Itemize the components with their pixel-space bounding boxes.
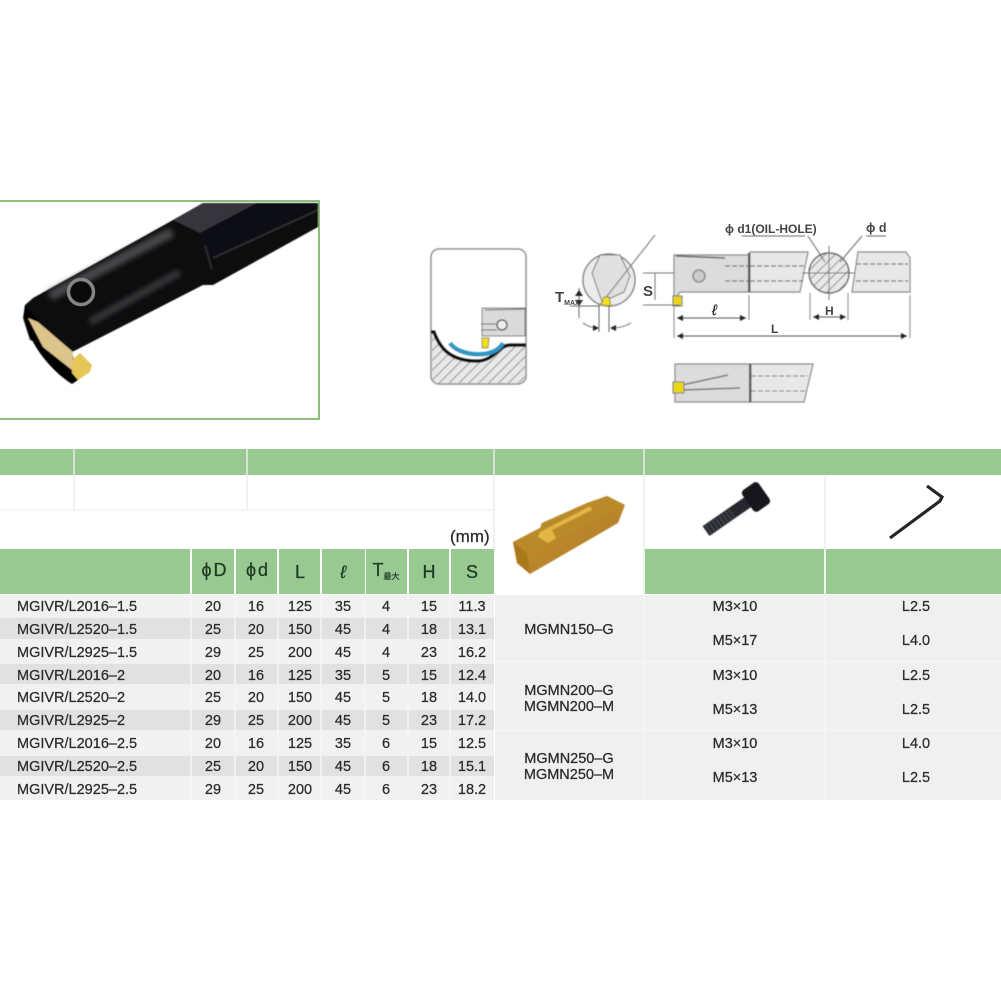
table header row: 最大 [384, 571, 400, 581]
table row stripes [0, 595, 1001, 800]
table: tool holder dimensions: 29 [205, 713, 221, 729]
table: insert models: MGMN200–G [524, 683, 614, 699]
screw hole [68, 280, 94, 304]
table: wrench sizes: L2.5 [902, 702, 930, 718]
unit label: (mm) [450, 527, 490, 546]
table: tool holder dimensions [17, 599, 486, 798]
table: tool holder dimensions: 125 [288, 736, 312, 752]
table: tool holder dimensions: 29 [205, 645, 221, 661]
table: tool holder dimensions: 20 [248, 622, 264, 638]
table: tool holder dimensions: 18.2 [458, 782, 486, 798]
table: tool holder dimensions: 150 [288, 622, 312, 638]
table header row: ℓ [339, 562, 347, 582]
table header row: ϕD [201, 560, 229, 580]
table: tool holder dimensions: 25 [248, 645, 264, 661]
table: tool holder dimensions: 150 [288, 690, 312, 706]
table: screw sizes: M5×13 [713, 770, 757, 786]
diagram: grooving operation [431, 249, 526, 384]
table: tool holder dimensions: 150 [288, 759, 312, 775]
table: insert models [524, 622, 614, 783]
table: tool holder dimensions: 20 [205, 668, 221, 684]
table: wrench sizes [902, 599, 930, 786]
table: tool holder dimensions: 125 [288, 668, 312, 684]
table: tool holder dimensions: 20 [205, 736, 221, 752]
table: screw sizes: M3×10 [713, 599, 757, 615]
table: tool holder dimensions: 15 [421, 736, 437, 752]
table: wrench sizes: L4.0 [902, 633, 930, 649]
table: tool holder dimensions: 16 [248, 599, 264, 615]
table: tool holder dimensions: 20 [248, 759, 264, 775]
label: H: H [825, 304, 834, 318]
table: wrench sizes: L4.0 [902, 736, 930, 752]
table: tool holder dimensions: 35 [335, 599, 351, 615]
table: tool holder dimensions: 18 [421, 622, 437, 638]
table: tool holder dimensions: 6 [382, 782, 390, 798]
table: tool holder dimensions: 16 [248, 668, 264, 684]
table: tool holder dimensions: 45 [335, 713, 351, 729]
table: tool holder dimensions: MGIVR/L2520–1.5 [17, 622, 137, 638]
table: tool holder dimensions: 25 [248, 782, 264, 798]
table: tool holder dimensions: 20 [205, 599, 221, 615]
table: insert models: MGMN150–G [524, 622, 614, 638]
table: wrench sizes: L2.5 [902, 599, 930, 615]
label: d: ϕ d [866, 221, 886, 235]
table: tool holder dimensions: 5 [382, 713, 390, 729]
table: tool holder dimensions: 45 [335, 690, 351, 706]
table: tool holder dimensions: MGIVR/L2925–1.5 [17, 645, 137, 661]
label: S: S [643, 283, 653, 300]
table: tool holder dimensions: 45 [335, 622, 351, 638]
label: l: ℓ [711, 302, 718, 319]
table header row: H [422, 562, 436, 582]
table: wrench sizes: L2.5 [902, 668, 930, 684]
panel: product photo of boring tool [0, 201, 319, 419]
table: tool holder dimensions: 25 [248, 713, 264, 729]
icon: gold grooving insert [513, 496, 625, 574]
table: tool holder dimensions: 11.3 [458, 599, 486, 615]
table: tool holder dimensions: MGIVR/L2016–2.5 [17, 736, 137, 752]
table: tool holder dimensions: 25 [205, 690, 221, 706]
table: tool holder dimensions: 5 [382, 668, 390, 684]
table: tool holder dimensions: 17.2 [458, 713, 486, 729]
table: screw sizes: M5×13 [713, 702, 757, 718]
table: tool holder dimensions: 23 [421, 713, 437, 729]
table: tool holder dimensions: 16 [248, 736, 264, 752]
table: wrench sizes: L2.5 [902, 770, 930, 786]
table header row: ϕd [246, 560, 270, 580]
table: tool holder dimensions: MGIVR/L2016–2 [17, 668, 125, 684]
table: tool holder dimensions: 29 [205, 782, 221, 798]
table header row [201, 560, 478, 582]
table: tool holder dimensions: 15 [421, 668, 437, 684]
table: tool holder dimensions: 45 [335, 782, 351, 798]
table: tool holder dimensions: 45 [335, 759, 351, 775]
label: T max: MAX [564, 300, 580, 307]
table: tool holder dimensions: MGIVR/L2520–2 [17, 690, 125, 706]
table: tool holder dimensions: 35 [335, 736, 351, 752]
table header row: T [372, 560, 384, 580]
table header row: S [466, 562, 478, 582]
table: tool holder dimensions: 23 [421, 645, 437, 661]
table: tool holder dimensions: 4 [382, 645, 390, 661]
table: tool holder dimensions: 12.5 [458, 736, 486, 752]
diagram: tool side view with dimensions [643, 221, 910, 402]
table header row: L [295, 562, 305, 582]
table: tool holder dimensions: 6 [382, 736, 390, 752]
diagram: end view with Tmax [555, 235, 655, 332]
label: d1 oil hole: ϕ d1(OIL-HOLE) [725, 222, 817, 236]
table: tool holder dimensions: 4 [382, 622, 390, 638]
table: tool holder dimensions: 25 [205, 622, 221, 638]
table: tool holder dimensions: 45 [335, 645, 351, 661]
table: tool holder dimensions: 18 [421, 759, 437, 775]
table: insert models: MGMN250–G [524, 751, 614, 767]
table: tool holder dimensions: MGIVR/L2520–2.5 [17, 759, 137, 775]
table: tool holder dimensions: 20 [248, 690, 264, 706]
table: tool holder dimensions: 12.4 [458, 668, 486, 684]
table: insert models: MGMN200–M [524, 699, 614, 715]
table: tool holder dimensions: 18 [421, 690, 437, 706]
icon: hex key wrench [890, 486, 942, 538]
table: tool holder dimensions: 35 [335, 668, 351, 684]
tool insert [24, 305, 78, 384]
table: screw sizes: M3×10 [713, 668, 757, 684]
table: tool holder dimensions: 15 [421, 599, 437, 615]
table: tool holder dimensions: MGIVR/L2925–2.5 [17, 782, 137, 798]
table: tool holder dimensions: MGIVR/L2016–1.5 [17, 599, 137, 615]
table: tool holder dimensions: 200 [288, 713, 312, 729]
table: tool holder dimensions: 13.1 [458, 622, 486, 638]
table: screw sizes [713, 599, 757, 786]
label: L: L [771, 322, 778, 336]
table: tool holder dimensions: 200 [288, 782, 312, 798]
table: tool holder dimensions: 16.2 [458, 645, 486, 661]
table: tool holder dimensions: 6 [382, 759, 390, 775]
icon: socket head screw [706, 481, 772, 531]
label: T max: T [555, 289, 564, 306]
table: tool holder dimensions: 23 [421, 782, 437, 798]
table: tool holder dimensions: 4 [382, 599, 390, 615]
table: insert models: MGMN250–M [524, 767, 614, 783]
panel: spec table backgrounds [0, 449, 1001, 595]
table: tool holder dimensions: 200 [288, 645, 312, 661]
table: tool holder dimensions: MGIVR/L2925–2 [17, 713, 125, 729]
table: tool holder dimensions: 25 [205, 759, 221, 775]
table: tool holder dimensions: 14.0 [458, 690, 486, 706]
table: tool holder dimensions: 125 [288, 599, 312, 615]
tool body [23, 203, 318, 384]
table: screw sizes: M3×10 [713, 736, 757, 752]
table: tool holder dimensions: 15.1 [458, 759, 486, 775]
table: screw sizes: M5×17 [713, 633, 757, 649]
table: tool holder dimensions: 5 [382, 690, 390, 706]
